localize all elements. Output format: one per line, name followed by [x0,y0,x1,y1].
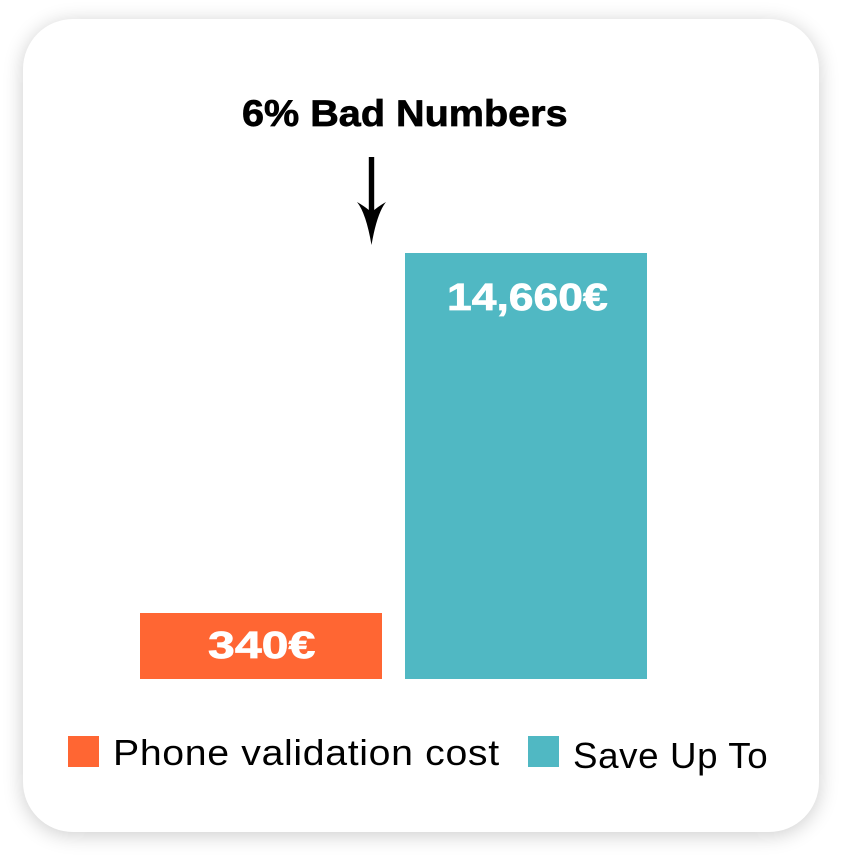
legend label: save up to: Save Up To [573,735,768,776]
bar: phone validation cost [140,613,382,679]
icon: arrow [357,157,386,245]
legend label: phone validation cost: Phone validation cost [113,732,500,773]
bar: save up to [405,253,647,679]
bar value: 14,660€: 14,660€ [447,277,608,319]
legend swatch: save up to [528,736,559,767]
legend swatch: phone validation cost [68,736,99,767]
bar value: 340€: 340€ [208,625,315,667]
title: 6% Bad Numbers [242,93,568,134]
